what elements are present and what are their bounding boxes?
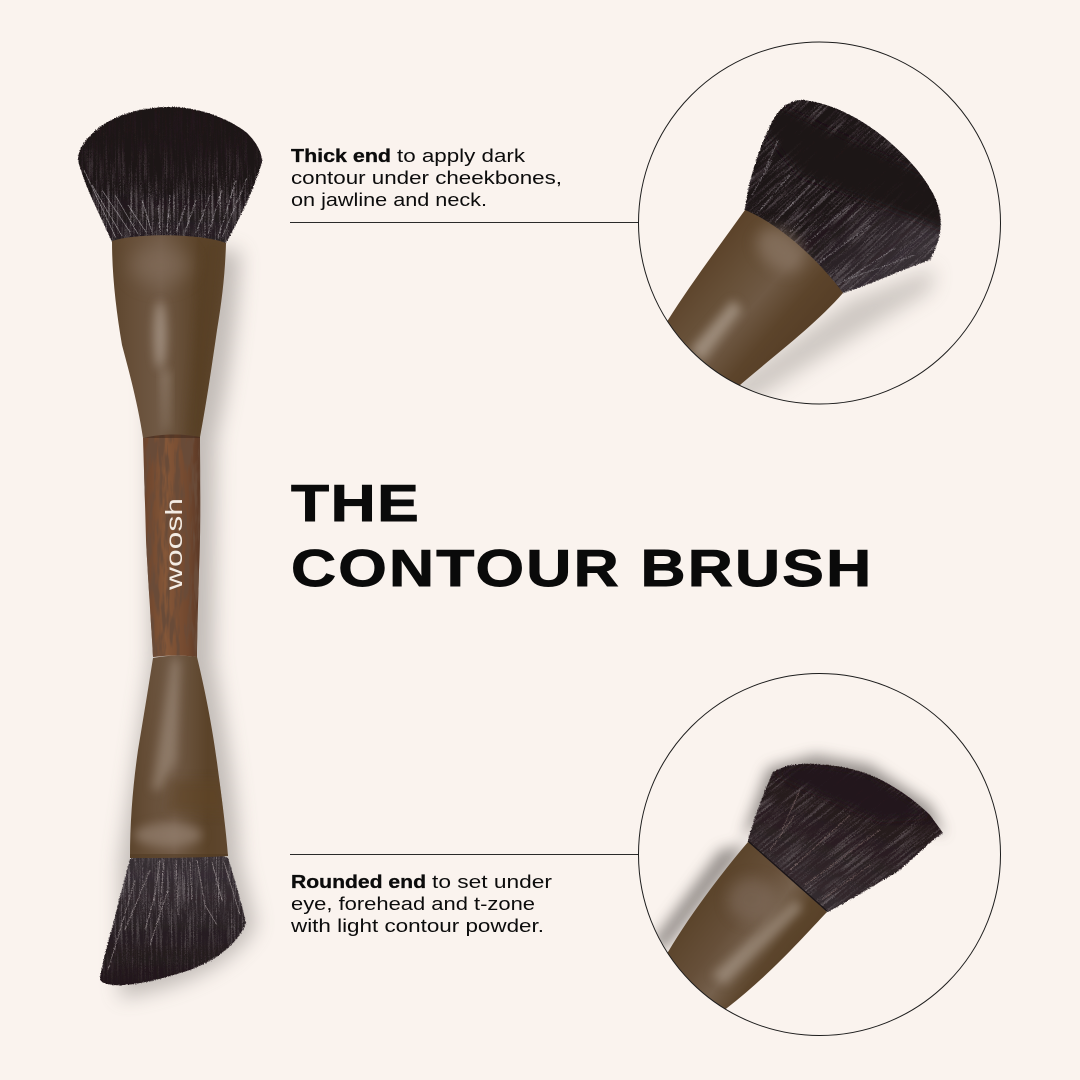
rounded end description: Rounded end xyxy=(291,872,426,892)
page canvas xyxy=(78,42,1001,1036)
circle outline xyxy=(638,674,1000,1036)
main title: CONTOUR BRUSH xyxy=(291,540,871,598)
thick end description: to apply dark xyxy=(397,146,526,166)
rounded end description: to set under xyxy=(432,872,552,892)
full brush product photo xyxy=(70,100,270,998)
upper ferrule xyxy=(112,235,226,438)
wooden handle xyxy=(143,434,200,657)
leader line: thick end xyxy=(290,222,639,224)
shadow of rounded end xyxy=(650,755,945,950)
circle detail: thick end xyxy=(638,42,1001,404)
thick end description: Thick end xyxy=(291,146,391,166)
thick end description: contour under cheekbones, xyxy=(291,168,562,188)
circle detail: rounded end xyxy=(638,673,1001,1036)
rounded end description: eye, forehead and t-zone xyxy=(291,894,535,914)
thick end description: on jawline and neck. xyxy=(291,190,487,210)
thick end bristles xyxy=(78,106,262,244)
thick end description xyxy=(291,146,562,210)
woosh logo on handle: woosh xyxy=(161,498,187,591)
enlarged ferrule xyxy=(668,842,827,1009)
leader line: rounded end xyxy=(290,854,639,856)
brush cast shadow xyxy=(120,250,256,998)
rounded end description: with light contour powder. xyxy=(290,916,544,936)
rounded end bristles xyxy=(100,856,246,986)
enlarged thick bristles xyxy=(744,100,942,294)
main title: THE xyxy=(291,475,419,533)
circle outline xyxy=(638,42,1000,404)
enlarged rounded bristles xyxy=(748,763,943,913)
enlarged ferrule xyxy=(668,210,843,385)
main title xyxy=(291,475,871,598)
lower ferrule xyxy=(130,656,228,858)
rounded end description xyxy=(290,872,552,936)
shadow of thick end xyxy=(740,264,940,398)
